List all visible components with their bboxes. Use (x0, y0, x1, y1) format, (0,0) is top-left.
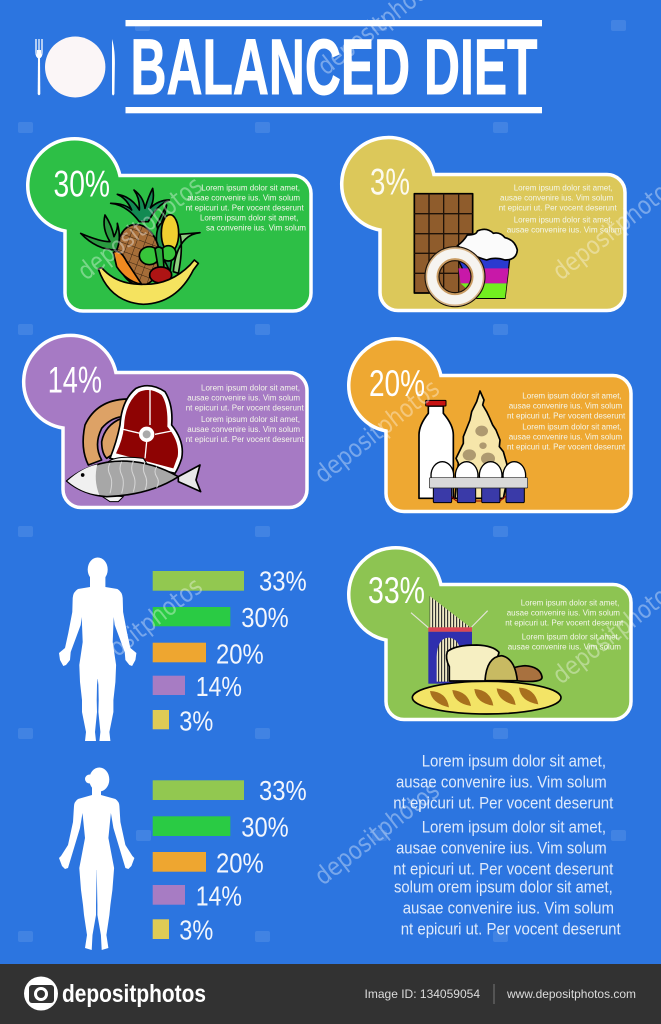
text block: ausae convenire ius. Vim solum (500, 193, 613, 203)
text block: nt epicuri ut. Per vocent deserunt (186, 403, 304, 413)
text block: bottom paragraph: nt epicuri ut. Per vocent deserunt (393, 860, 614, 878)
text block: Lorem ipsum dolor sit amet, (521, 598, 619, 608)
text block (186, 383, 304, 444)
illustration: chocolate, cupcake and doughnut (414, 194, 517, 307)
bar chart: female (153, 775, 307, 946)
text block: bottom paragraph (393, 753, 621, 938)
text block: Lorem ipsum dolor sit amet, (514, 183, 613, 193)
bar chart: male: 33% (259, 566, 307, 597)
bar chart: male: 20% (216, 638, 264, 669)
top rule (126, 20, 542, 26)
text block: ausae convenire ius. Vim solum (187, 393, 300, 403)
text block: ausae convenire ius. Vim solum (509, 432, 622, 442)
watermarks (72, 0, 661, 891)
bottom rule (126, 107, 542, 113)
bar chart: male: 14% (196, 671, 242, 702)
panel shape (24, 335, 307, 508)
text block: sa convenire ius. Vim solum (206, 223, 306, 233)
icon: camera logo (24, 976, 58, 1010)
bar chart: female: 20% (216, 848, 264, 879)
text block: Lorem ipsum dolor sit amet, (522, 422, 622, 432)
watermarks: depositphotos (72, 171, 208, 286)
footer bar (0, 964, 661, 1024)
icon: knife (112, 39, 115, 96)
text block: Lorem ipsum dolor sit amet, (201, 383, 300, 393)
illustration: bread and pasta (411, 596, 561, 714)
image id: Image ID: 134059054 (364, 987, 480, 1001)
text block: Lorem ipsum dolor sit amet, (201, 414, 300, 424)
panel: fruit and vegetables 30% (28, 139, 311, 311)
text block (505, 598, 624, 652)
panel: dairy 20% (349, 339, 631, 512)
illustration: fruit bowl (81, 188, 200, 304)
text block: bottom paragraph: ausae convenire ius. Vim solum (396, 774, 607, 792)
panel shape (28, 139, 311, 311)
percent: 20% (369, 363, 425, 404)
icon: female body (59, 768, 134, 950)
text block: ausae convenire ius. Vim solum (507, 224, 622, 234)
bar chart: male: 3% (179, 705, 213, 736)
text block (499, 183, 622, 234)
text block: ausae convenire ius. Vim solum (509, 400, 622, 410)
text block: nt epicuri ut. Per vocent deserunt (186, 434, 304, 444)
text block: ausae convenire ius. Vim solum (507, 608, 620, 618)
bar chart: female: 33% (259, 775, 307, 806)
watermarks: depositphotos (309, 776, 445, 891)
percent: 14% (48, 360, 102, 401)
text block: bottom paragraph: nt epicuri ut. Per vocent deserunt (401, 920, 621, 938)
text block: nt epicuri ut. Per vocent deserunt (507, 442, 626, 452)
text block: bottom paragraph: ausae convenire ius. Vim solum (396, 839, 607, 857)
panel shape (342, 138, 625, 310)
text block: Lorem ipsum dolor sit amet, (514, 214, 613, 224)
text block: bottom paragraph: ausae convenire ius. Vim solum (403, 899, 614, 917)
panel: bread and cereals 33% (349, 548, 631, 720)
text block: ausae convenire ius. Vim solum (187, 193, 300, 203)
text block: Lorem ipsum dolor sit amet, (201, 183, 300, 193)
icon: plate (45, 36, 105, 98)
watermarks: depositphotos (72, 572, 208, 687)
percent: 33% (368, 570, 425, 611)
panel: sweets 3% (342, 138, 625, 310)
header (36, 20, 542, 113)
bar chart: female: 14% (196, 880, 242, 911)
text block: ausae convenire ius. Vim solum (508, 642, 621, 652)
panel shape (349, 339, 631, 512)
text block: Lorem ipsum dolor sit amet, (200, 213, 298, 223)
text block: Lorem ipsum dolor sit amet, (522, 632, 620, 642)
panel shape (349, 548, 631, 720)
watermarks: depositphotos (309, 374, 445, 489)
text block: Lorem ipsum dolor sit amet, (522, 390, 622, 400)
text block: nt epicuri ut. Per vocent deserunt (507, 410, 626, 420)
text block: bottom paragraph: Lorem ipsum dolor sit amet, (422, 753, 606, 771)
percent: 30% (54, 164, 110, 204)
icon: male body (59, 558, 136, 741)
bar chart: female: 30% (241, 812, 289, 843)
text block: ausae convenire ius. Vim solum (187, 424, 300, 434)
text block: nt epicuri ut. Per vocent deserunt (186, 203, 304, 213)
bar chart: male (153, 566, 307, 736)
text block: bottom paragraph: solum orem ipsum dolor sit amet, (394, 879, 613, 897)
text block: nt epicuri ut. Per vocent deserunt (499, 203, 617, 213)
bar chart: female: 3% (179, 915, 213, 946)
illustration: meat and fish (67, 386, 201, 502)
text block (186, 183, 306, 233)
text block: bottom paragraph: nt epicuri ut. Per vocent deserunt (393, 794, 614, 812)
text block: nt epicuri ut. Per vocent deserunt (505, 618, 624, 628)
text block (507, 390, 626, 452)
panel: meat and fish 14% (24, 335, 307, 508)
logo wordmark: depositphotos (62, 980, 206, 1008)
percent: 3% (370, 161, 410, 202)
bar chart: male: 30% (241, 602, 289, 633)
text block: bottom paragraph: Lorem ipsum dolor sit amet, (422, 818, 606, 836)
icon: fork (36, 39, 42, 95)
website: www.depositphotos.com (506, 987, 636, 1001)
illustration: milk, cheese and eggs (419, 391, 528, 503)
